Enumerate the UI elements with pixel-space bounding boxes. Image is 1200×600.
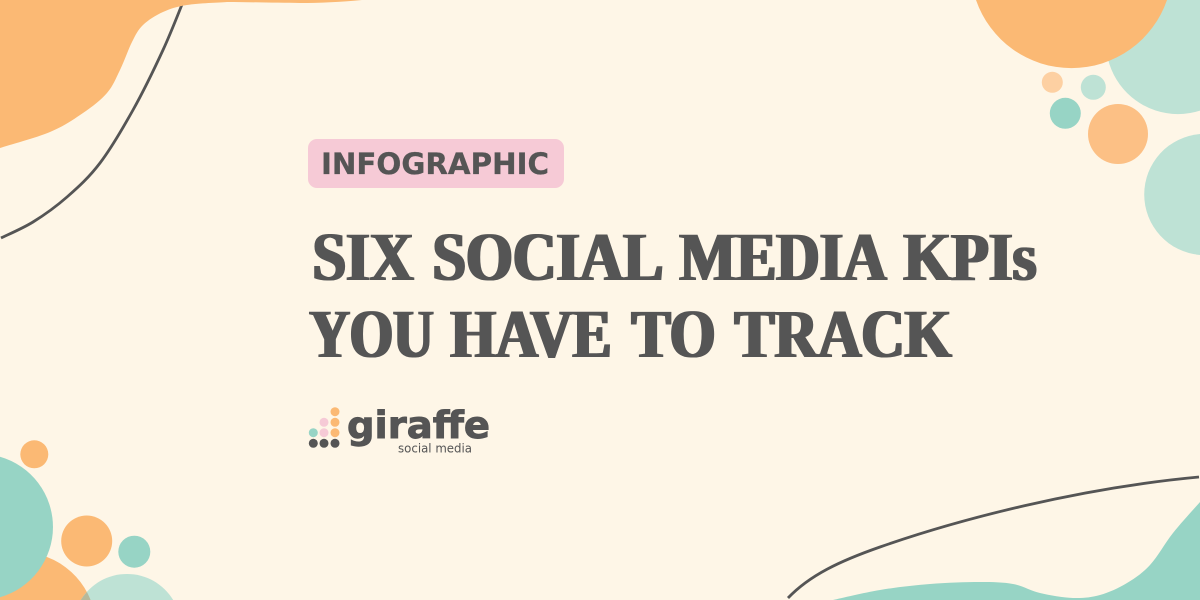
top-right circle cluster: [976, 0, 1200, 255]
logo wordmark: giraffe: [347, 404, 490, 447]
bottom-left circle cluster: [0, 440, 173, 600]
title line 1: [312, 219, 1036, 295]
title line 1: SIX: [312, 219, 414, 295]
title line 2: TRACK: [734, 296, 952, 372]
tag: infographic: [308, 139, 564, 188]
title line 1: SOCIAL: [432, 219, 664, 295]
logo tagline: social media: [398, 442, 472, 456]
tag: infographic: INFOGRAPHIC: [321, 147, 549, 181]
top-left orange blob: [0, 0, 362, 148]
bottom-right teal blob: [833, 502, 1200, 600]
title line 2: YOU: [310, 296, 434, 372]
logo dots: [309, 407, 340, 448]
title line 2: HAVE: [450, 296, 612, 372]
top-left curved line: [1, 2, 183, 238]
title line 2: [310, 296, 952, 372]
title line 1: MEDIA: [680, 219, 887, 295]
title line 2: TO: [632, 296, 716, 372]
logo: giraffe social media: [309, 404, 490, 456]
title line 1: KPIs: [904, 219, 1036, 295]
title: [310, 219, 1036, 372]
bottom-right curved line: [788, 477, 1199, 598]
